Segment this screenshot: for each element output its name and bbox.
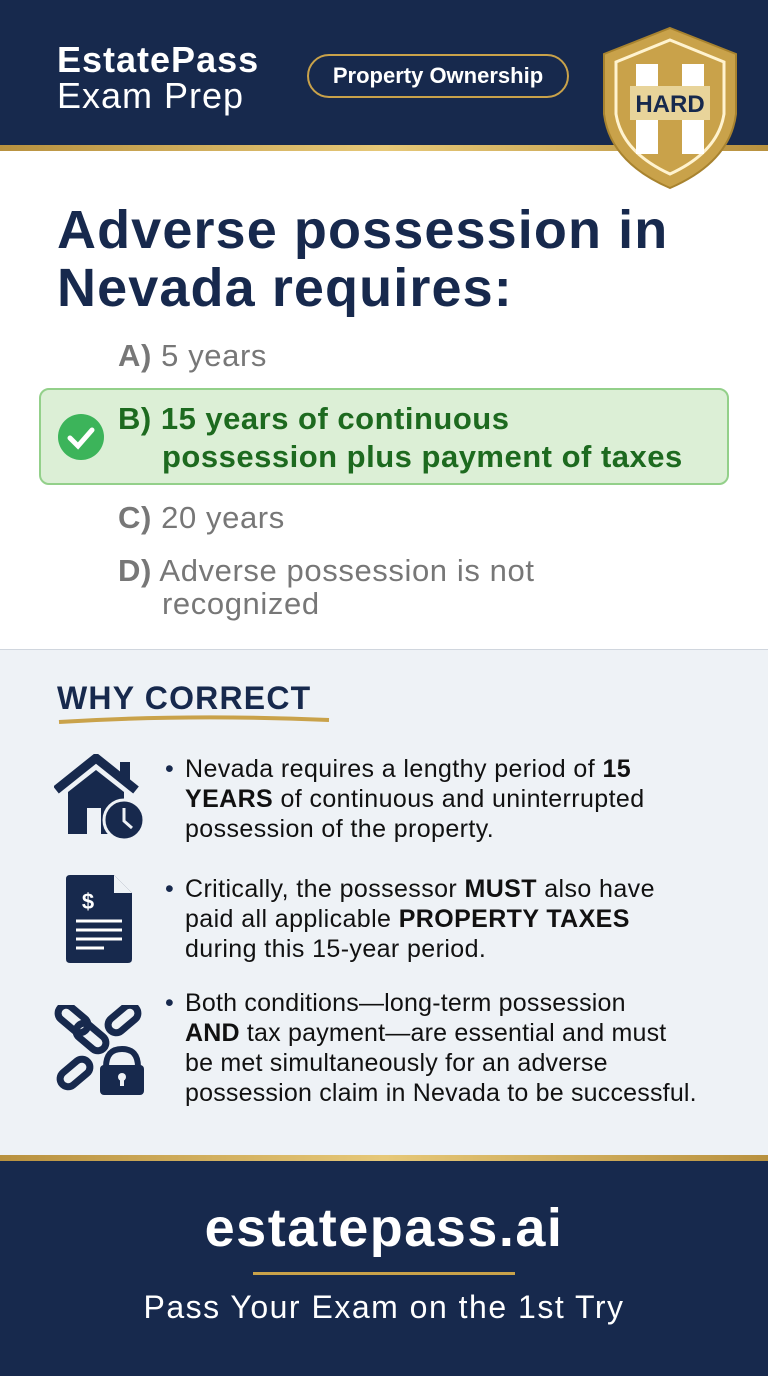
option A: A) 5 years	[118, 338, 267, 373]
bullet 3	[185, 988, 730, 1108]
bullet 2: Critically, the possessor MUST also have paid all applicable PROPERTY TAXES during this 15-year period.	[185, 875, 655, 963]
explanation panel	[0, 649, 768, 1155]
option B correct: B) 15 years of continuous	[118, 401, 509, 436]
question title	[57, 200, 668, 318]
icon: house clock	[54, 754, 142, 838]
option D: D) Adverse possession is not	[118, 553, 535, 588]
tagline: Pass Your Exam on the 1st Try	[143, 1289, 625, 1325]
question title: Nevada requires:	[57, 258, 513, 318]
difficulty badge: HARD shield	[603, 26, 737, 190]
icon: tax document	[66, 875, 132, 963]
question title: Adverse possession in	[57, 200, 668, 260]
brand logo text: Exam Prep	[57, 75, 244, 116]
bullet 3: possession claim in Nevada to be successful.	[185, 1079, 697, 1107]
category pill: Property Ownership	[333, 63, 543, 88]
option C: C) 20 years	[118, 500, 285, 535]
option B correct	[39, 388, 729, 485]
bullet 3: be met simultaneously for an adverse	[185, 1049, 608, 1077]
category pill	[307, 54, 569, 98]
brand logo text	[57, 39, 259, 116]
bullet 3: AND tax payment—are essential and must	[185, 1019, 666, 1047]
footer url: estatepass.ai	[205, 1198, 563, 1258]
icon: chain lock	[54, 1005, 144, 1095]
icon: tax document: $	[82, 889, 94, 914]
icon: check	[58, 414, 104, 460]
heading: why correct: WHY CORRECT	[57, 680, 311, 716]
header band	[0, 0, 768, 145]
brand logo text: EstatePass	[57, 39, 259, 80]
option D	[118, 553, 535, 621]
difficulty badge: HARD shield: HARD	[635, 91, 705, 118]
option B correct: possession plus payment of taxes	[162, 439, 683, 474]
footer	[0, 1161, 768, 1376]
bullet 3: Both conditions—long-term possession	[185, 989, 626, 1017]
option D: recognized	[162, 586, 320, 621]
bullet 1: Nevada requires a lengthy period of 15 YEARS of continuous and uninterrupted possession of the property.	[185, 755, 645, 843]
